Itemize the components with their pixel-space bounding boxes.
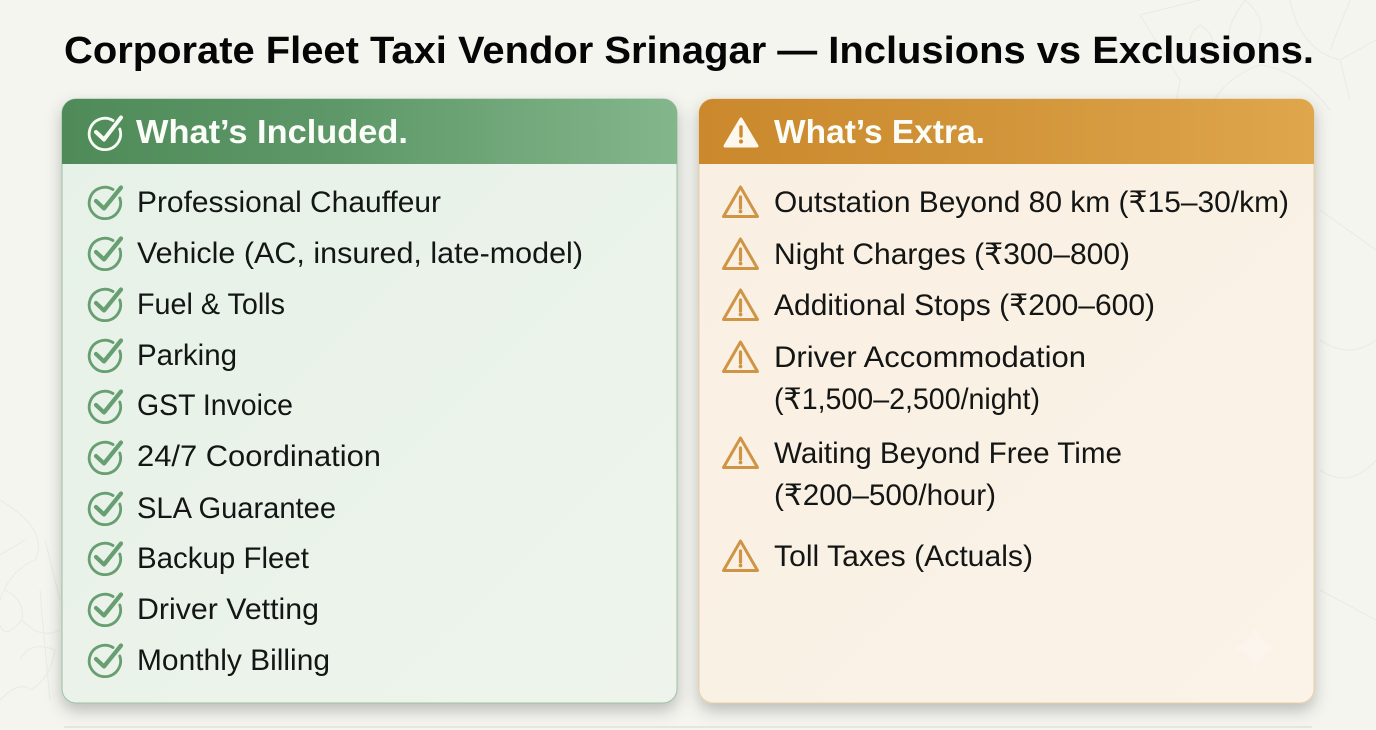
list: extra items: Toll Taxes (Actuals)	[774, 540, 1033, 573]
list: included items: SLA Guarantee	[137, 492, 336, 525]
list: extra items: (₹1,500–2,500/night)	[774, 383, 1040, 416]
panel header: included	[62, 99, 677, 164]
list: included items: Vehicle (AC, insured, late-model)	[137, 237, 583, 270]
list: extra items: Outstation Beyond 80 km (₹15–30/km)	[774, 186, 1289, 219]
title: Corporate Fleet Taxi Vendor Srinagar — Inclusions vs Exclusions.	[64, 30, 1314, 72]
list: included items: Monthly Billing	[137, 644, 330, 677]
list: included items: Driver Vetting	[137, 593, 319, 626]
icon: header warning	[725, 119, 757, 146]
list: extra items	[724, 186, 1289, 573]
list: included items: 24/7 Coordination	[137, 440, 381, 473]
list: included items: Professional Chauffeur	[137, 186, 441, 219]
list: included items: Backup Fleet	[137, 542, 309, 575]
icon: sparkle	[1233, 626, 1278, 670]
panel: included	[62, 99, 677, 703]
panel header: extra	[699, 99, 1314, 164]
list: included items: Parking	[137, 339, 237, 372]
list: included items: Fuel & Tolls	[137, 288, 285, 321]
heading: included: What’s Included.	[136, 114, 408, 151]
panel: extra	[699, 99, 1314, 703]
list: included items: GST Invoice	[137, 389, 293, 422]
list: included items	[89, 186, 583, 677]
heading: extra: What’s Extra.	[774, 114, 985, 151]
icon: header check	[89, 118, 121, 150]
list: extra items: Night Charges (₹300–800)	[774, 238, 1130, 271]
list: extra items: Additional Stops (₹200–600)	[774, 289, 1155, 322]
list: extra items: (₹200–500/hour)	[774, 479, 996, 512]
list: extra items: Waiting Beyond Free Time	[774, 437, 1122, 470]
list: extra items: Driver Accommodation	[774, 341, 1086, 374]
